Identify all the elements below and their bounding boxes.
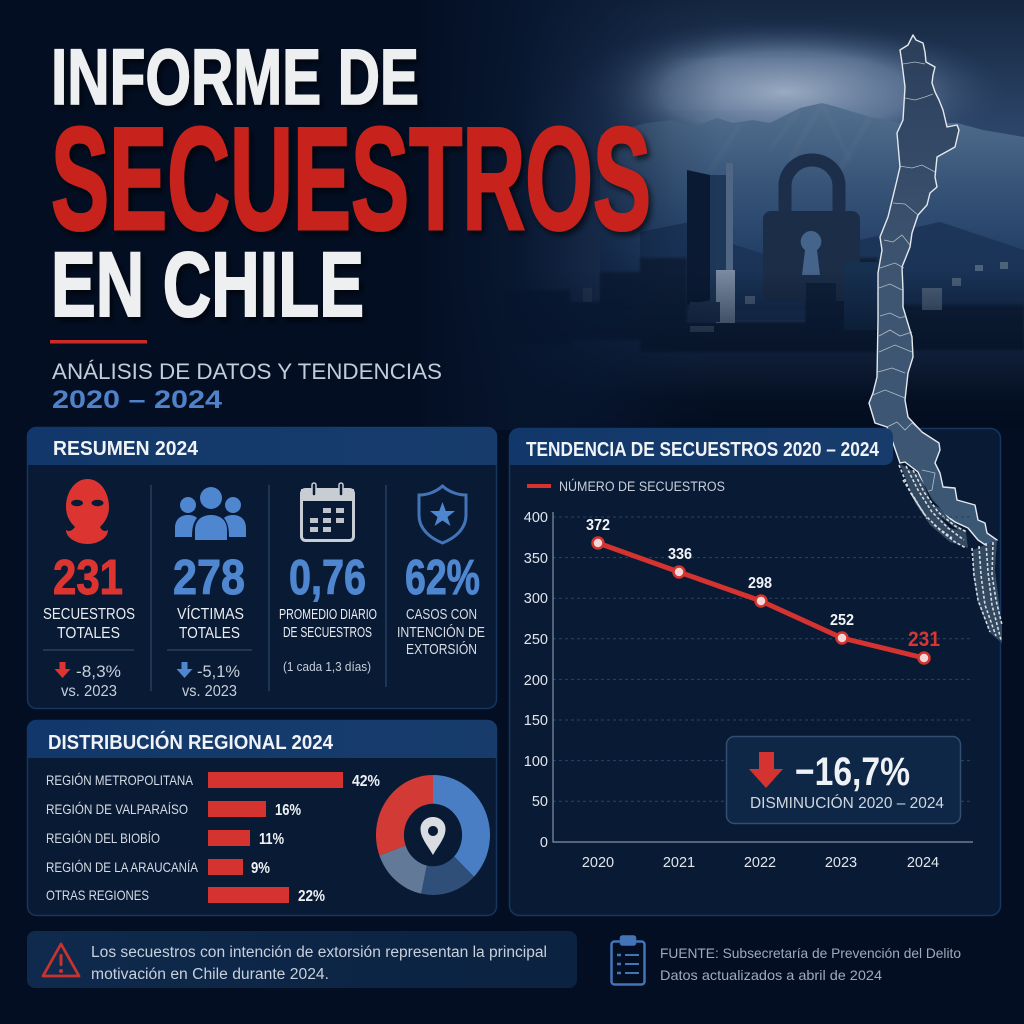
- callout: extorsión note: Los secuestros con intención de extorsión representan la principal: [91, 944, 547, 961]
- line chart: 150: [524, 713, 548, 729]
- stat: promedio diario: [279, 483, 377, 674]
- callout: extorsión note: [27, 931, 577, 988]
- callout: disminución: [726, 736, 960, 824]
- line chart: 2021: [663, 855, 695, 871]
- line chart: 2024: [907, 855, 939, 871]
- stat: extorsión: CASOS CON: [406, 607, 477, 623]
- stat: víctimas totales: TOTALES: [179, 625, 240, 642]
- tendencia heading tab: TENDENCIA DE SECUESTROS 2020 – 2024: [526, 439, 880, 461]
- heading: DISTRIBUCIÓN REGIONAL 2024: [48, 730, 334, 754]
- bar chart: REGIÓN DE LA ARAUCANÍA: [46, 859, 199, 875]
- stat: promedio diario: PROMEDIO DIARIO: [279, 607, 377, 623]
- icon: padlock: [763, 160, 860, 301]
- chart legend: NÚMERO DE SECUESTROS: [559, 479, 725, 494]
- bar chart: 42%: [352, 773, 380, 790]
- stat: víctimas totales: VÍCTIMAS: [177, 604, 244, 623]
- line chart: 0: [540, 835, 548, 851]
- title: INFORME DE: [51, 32, 419, 121]
- southern fjords and islands: [899, 464, 1002, 643]
- bar chart: REGIÓN DEL BIOBÍO: [46, 830, 160, 846]
- line chart: 298: [748, 575, 772, 592]
- stat: extorsión: INTENCIÓN DE: [397, 624, 485, 641]
- donut chart: [376, 775, 490, 895]
- title: EN CHILE: [51, 234, 364, 336]
- stat: extorsión: 62%: [405, 551, 480, 605]
- line chart: 400: [524, 510, 548, 526]
- bar chart: REGIÓN METROPOLITANA: [46, 772, 194, 788]
- source note: FUENTE: Subsecretaría de Prevención del Delito: [660, 945, 961, 961]
- stat: víctimas totales: -5,1%: [197, 662, 240, 681]
- stat: extorsión: [397, 486, 485, 658]
- icon: calendar: [301, 483, 354, 540]
- stat: secuestros totales: 231: [53, 551, 123, 605]
- icon: location pin: [420, 817, 446, 855]
- panel: tendencia de secuestros: [510, 428, 1000, 916]
- panel: resumen 2024: [27, 427, 497, 708]
- bar chart: 16%: [275, 802, 301, 819]
- callout: disminución: DISMINUCIÓN 2020 – 2024: [750, 795, 944, 812]
- stat: víctimas totales: [167, 487, 252, 700]
- line chart: 2020: [582, 855, 614, 871]
- tendencia heading tab: [509, 428, 893, 465]
- source note: Datos actualizados a abril de 2024: [660, 967, 882, 983]
- line chart: 200: [524, 673, 548, 689]
- subtitle: 2020 – 2024: [52, 386, 222, 414]
- icon: warning triangle: [43, 944, 79, 976]
- panel: distribución regional: [27, 720, 497, 916]
- stat: secuestros totales: [43, 479, 135, 700]
- source note: [612, 936, 961, 984]
- line chart: 252: [830, 612, 854, 629]
- tower: [687, 163, 735, 323]
- stat: extorsión: EXTORSIÓN: [406, 641, 477, 658]
- subtitle: [52, 359, 442, 414]
- callout: extorsión note: motivación en Chile durante 2024.: [91, 966, 329, 983]
- bar chart: [46, 772, 380, 905]
- subtitle: ANÁLISIS DE DATOS Y TENDENCIAS: [52, 359, 442, 384]
- map of Chile: [869, 35, 1002, 643]
- icon: down arrow: [749, 752, 783, 788]
- line chart: 336: [668, 546, 692, 563]
- icon: people: [175, 487, 246, 540]
- stat: secuestros totales: -8,3%: [76, 662, 121, 681]
- stat: promedio diario: (1 cada 1,3 días): [283, 659, 371, 674]
- stat: secuestros totales: SECUESTROS: [43, 606, 135, 623]
- bar chart: OTRAS REGIONES: [46, 887, 149, 903]
- title accent rule: [50, 340, 147, 344]
- icon: clipboard: [612, 936, 644, 984]
- line chart: 250: [524, 632, 548, 648]
- bar chart: 9%: [251, 860, 270, 877]
- line chart: 100: [524, 754, 548, 770]
- line chart: [524, 510, 973, 871]
- photo: stormy sky, mountains and city: [420, 0, 1024, 430]
- bar chart: 22%: [298, 888, 325, 905]
- stat: promedio diario: 0,76: [289, 551, 366, 605]
- callout: disminución: −16,7%: [795, 750, 910, 794]
- stat: secuestros totales: vs. 2023: [61, 683, 117, 700]
- line chart: 300: [524, 591, 548, 607]
- stat: promedio diario: DE SECUESTROS: [283, 625, 372, 641]
- bar chart: REGIÓN DE VALPARAÍSO: [46, 801, 188, 817]
- line chart: 231: [908, 628, 940, 651]
- stat: víctimas totales: 278: [173, 551, 245, 605]
- stat: secuestros totales: TOTALES: [57, 625, 120, 642]
- line chart: 350: [524, 551, 548, 567]
- stat: víctimas totales: vs. 2023: [182, 683, 237, 700]
- line chart: 2022: [744, 855, 776, 871]
- icon: shield: [419, 486, 466, 543]
- line chart: 2023: [825, 855, 857, 871]
- lit buildings: [583, 262, 1008, 332]
- line chart: 372: [586, 517, 610, 534]
- heading: RESUMEN 2024: [53, 438, 199, 460]
- line chart: 50: [532, 794, 548, 810]
- icon: balaclava: [66, 479, 109, 544]
- title: [51, 32, 651, 336]
- bar chart: 11%: [259, 831, 284, 848]
